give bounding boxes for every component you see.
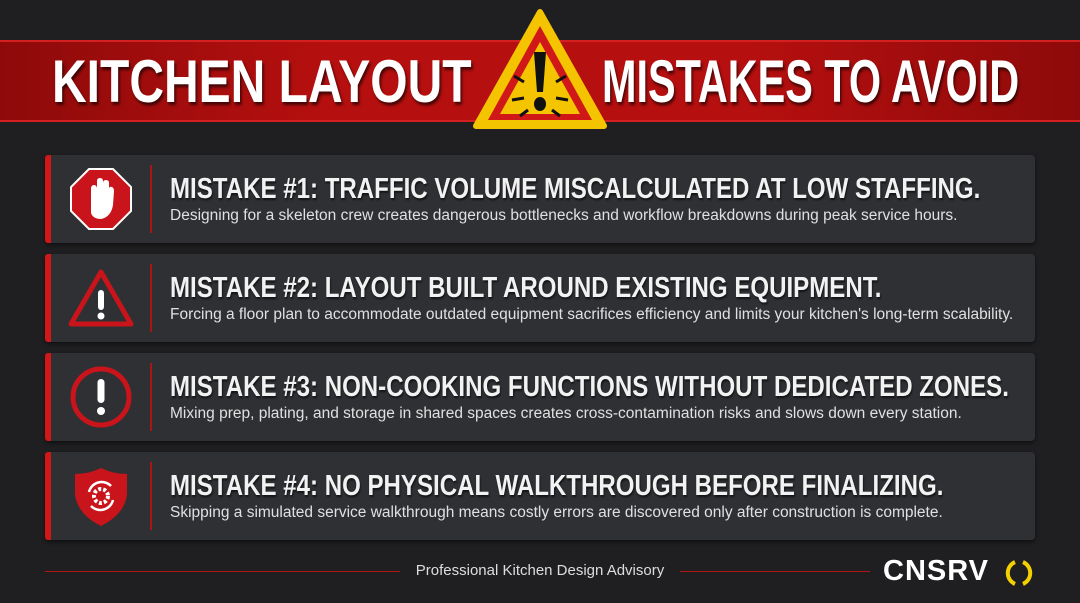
icon: stop hand (70, 168, 132, 230)
panel: mistake 4 (45, 452, 1035, 540)
title left: KITCHEN LAYOUT (52, 48, 472, 115)
text 3: Mixing prep, plating, and storage in shared spaces creates cross-contamination risks and slows down every station. (170, 405, 962, 422)
icon: shield gear (75, 468, 127, 526)
panel: mistake 3 (45, 353, 1035, 441)
heading 1: MISTAKE #1: TRAFFIC VOLUME MISCALCULATED AT LOW STAFFING. (170, 173, 980, 205)
title right: MISTAKES TO AVOID (602, 48, 1019, 115)
heading 4: MISTAKE #4: NO PHYSICAL WALKTHROUGH BEFORE FINALIZING. (170, 470, 943, 502)
text 4: Skipping a simulated service walkthrough means costly errors are discovered only after construction is complete. (170, 504, 943, 521)
footer text: Professional Kitchen Design Advisory (416, 562, 664, 579)
panel: mistake 2 (45, 254, 1035, 342)
panel: mistake 1 (45, 155, 1035, 243)
heading 3: MISTAKE #3: NON-COOKING FUNCTIONS WITHOUT DEDICATED ZONES. (170, 371, 1009, 403)
icon: exclamation circle (70, 366, 132, 428)
icon: warning (68, 270, 134, 326)
icon: warning triangle (473, 9, 607, 129)
text 1: Designing for a skeleton crew creates dangerous bottlenecks and workflow breakdowns during peak service hours. (170, 207, 957, 224)
logo: CNSRV (883, 555, 989, 587)
text 2: Forcing a floor plan to accommodate outdated equipment sacrifices efficiency and limits your kitchen's long-term scalability. (170, 306, 1013, 323)
footer lines (45, 571, 400, 572)
heading 2: MISTAKE #2: LAYOUT BUILT AROUND EXISTING EQUIPMENT. (170, 272, 881, 304)
header band (0, 40, 1080, 122)
